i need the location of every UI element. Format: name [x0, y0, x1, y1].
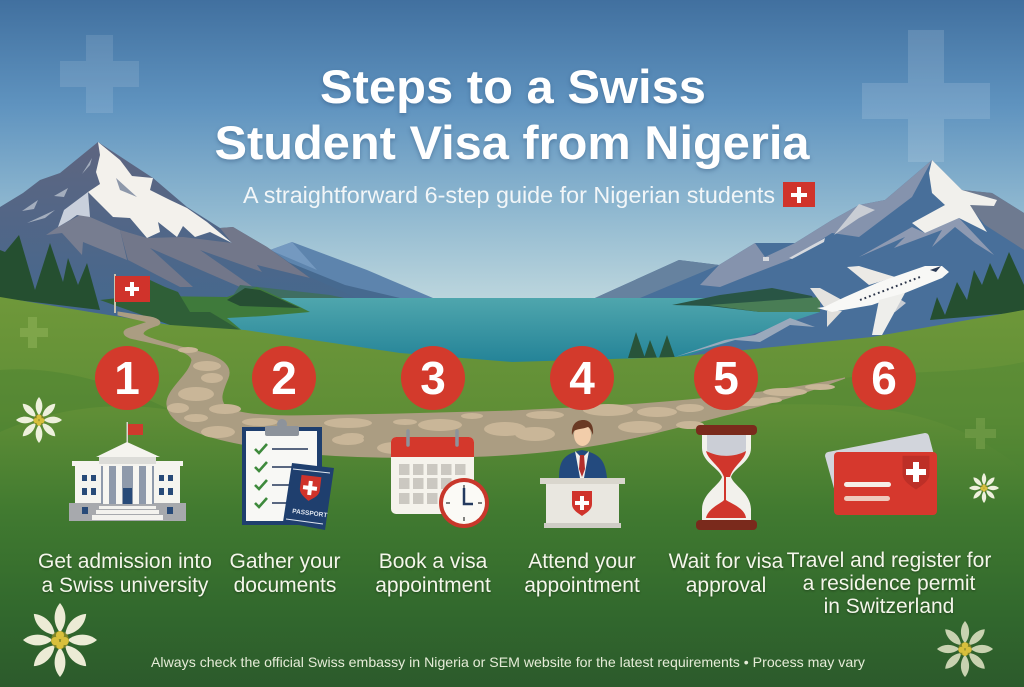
trees left	[0, 235, 100, 310]
swiss flag badge	[783, 182, 815, 207]
label: step 3: appointment	[375, 574, 491, 597]
label: step 4: appointment	[524, 574, 640, 597]
background sky	[0, 0, 1024, 300]
right mountains	[595, 160, 1024, 360]
number badge 6: 6	[871, 352, 897, 404]
decorative cross top right	[862, 30, 990, 162]
icon: officer at podium	[540, 420, 625, 528]
icon: residence permit card	[825, 433, 937, 515]
number badge 1	[95, 346, 159, 410]
number badge 2: 2	[271, 352, 297, 404]
label: step 3: Book a visa	[379, 550, 487, 573]
number badge 5: 5	[713, 352, 739, 404]
left mountains	[0, 142, 433, 320]
right hill shading	[760, 362, 1024, 470]
subtitle: A straightforward 6-step guide for Nigerian students	[243, 182, 775, 208]
number badge 4: 4	[569, 352, 595, 404]
label: step 2: documents	[234, 574, 336, 597]
number badge 4	[550, 346, 614, 410]
label: step 1: a Swiss university	[42, 574, 209, 597]
edelweiss flower lower left	[23, 603, 97, 677]
number badge 3: 3	[420, 352, 446, 404]
number badge 6	[852, 346, 916, 410]
title	[214, 60, 810, 169]
grass hill	[0, 297, 1024, 687]
number badge 3	[401, 346, 465, 410]
icon: university building	[69, 422, 186, 521]
icon: checklist and passport	[242, 419, 334, 530]
label: step 1: Get admission into	[38, 550, 212, 573]
swiss flag on pole	[114, 274, 150, 313]
decorative cross right	[965, 418, 996, 449]
icon: calendar and clock	[391, 431, 489, 528]
winding stone path	[118, 312, 845, 457]
title: Steps to a Swiss	[320, 60, 706, 113]
decorative cross top left	[60, 35, 139, 113]
airplane	[810, 266, 949, 335]
label: step 6: a residence permit	[803, 572, 976, 595]
footer note: Always check the official Swiss embassy in Nigeria or SEM website for the latest requirements • Process may vary	[151, 654, 865, 670]
label: step 4: Attend your	[528, 550, 636, 573]
right shore spit	[672, 288, 820, 357]
label: step 5: approval	[686, 574, 766, 597]
number badge 1: 1	[114, 352, 140, 404]
hill shading	[0, 369, 170, 432]
step 4	[524, 346, 640, 597]
icon: checklist and passport: PASSPORT	[292, 508, 328, 519]
number badge 2	[252, 346, 316, 410]
label: step 6: in Switzerland	[824, 595, 954, 618]
label: step 6: Travel and register for	[787, 549, 991, 572]
step 3	[375, 346, 491, 597]
edelweiss flower right small	[969, 473, 999, 503]
lake	[227, 298, 820, 370]
left shore forest	[100, 280, 310, 333]
step 6	[787, 346, 991, 618]
number badge 5	[694, 346, 758, 410]
trees by lake	[628, 332, 675, 358]
trees right	[930, 252, 1024, 320]
title: Student Visa from Nigeria	[214, 116, 810, 169]
step 1	[38, 346, 212, 597]
icon: hourglass	[696, 425, 757, 530]
step 5	[669, 346, 784, 597]
decorative cross left	[20, 317, 48, 348]
step 2	[230, 346, 340, 597]
edelweiss flower upper left	[16, 397, 62, 443]
label: step 5: Wait for visa	[669, 550, 783, 573]
edelweiss flower lower right	[937, 621, 993, 677]
label: step 2: Gather your	[230, 550, 340, 573]
